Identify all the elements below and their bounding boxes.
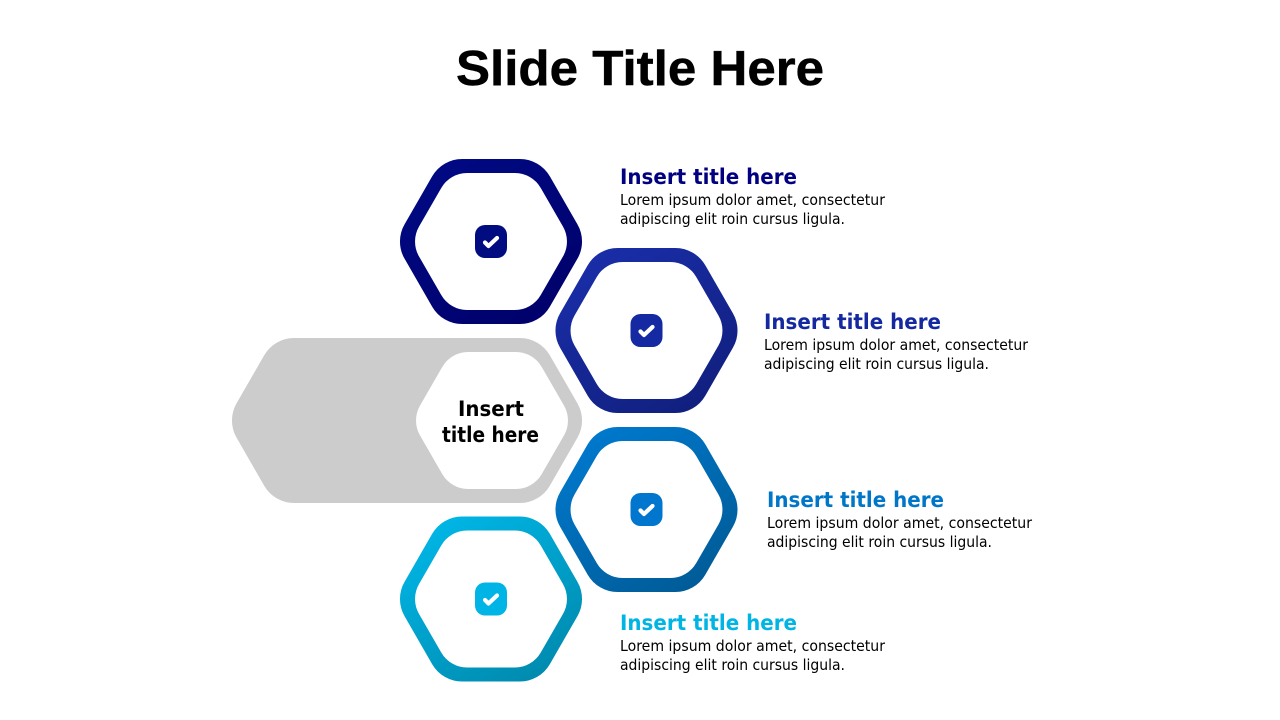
- hexagon 1: navy: [400, 159, 582, 324]
- text block 2: adipiscing elit roin cursus ligula.: [764, 355, 989, 373]
- central label: [442, 397, 539, 448]
- grey hexagon body: [232, 338, 582, 503]
- text block 3: [767, 488, 1033, 551]
- text block 2: [764, 310, 1029, 373]
- icon: check badge cyan: [475, 582, 507, 616]
- icon: check badge navy: [475, 225, 507, 258]
- text block 2: Lorem ipsum dolor amet, consectetur: [764, 336, 1029, 354]
- hexagon 2: royal blue: [555, 248, 738, 413]
- text block 4: Lorem ipsum dolor amet, consectetur: [620, 637, 886, 655]
- central label: title here: [442, 423, 539, 448]
- text block 3: Insert title here: [767, 488, 944, 513]
- white inner hexagon: [416, 352, 568, 489]
- hexagon 3: medium blue: [555, 427, 738, 592]
- text block 4: adipiscing elit roin cursus ligula.: [620, 656, 845, 674]
- icon: check badge medium blue: [630, 493, 662, 526]
- panel: central grey hexagon: [232, 338, 582, 503]
- text block 1: Lorem ipsum dolor amet, consectetur: [620, 191, 886, 209]
- text block 4: Insert title here: [620, 611, 797, 636]
- icon: check badge royal blue: [630, 314, 662, 347]
- hexagon 4: cyan: [400, 516, 582, 682]
- text block 4: [620, 611, 886, 674]
- central label: Insert: [458, 397, 524, 422]
- text block 3: adipiscing elit roin cursus ligula.: [767, 533, 992, 551]
- text block 1: [620, 165, 886, 228]
- text block 3: Lorem ipsum dolor amet, consectetur: [767, 514, 1033, 532]
- text block 1: adipiscing elit roin cursus ligula.: [620, 210, 845, 228]
- title: Slide Title Here: [456, 42, 824, 96]
- text block 2: Insert title here: [764, 310, 941, 335]
- text block 1: Insert title here: [620, 165, 797, 190]
